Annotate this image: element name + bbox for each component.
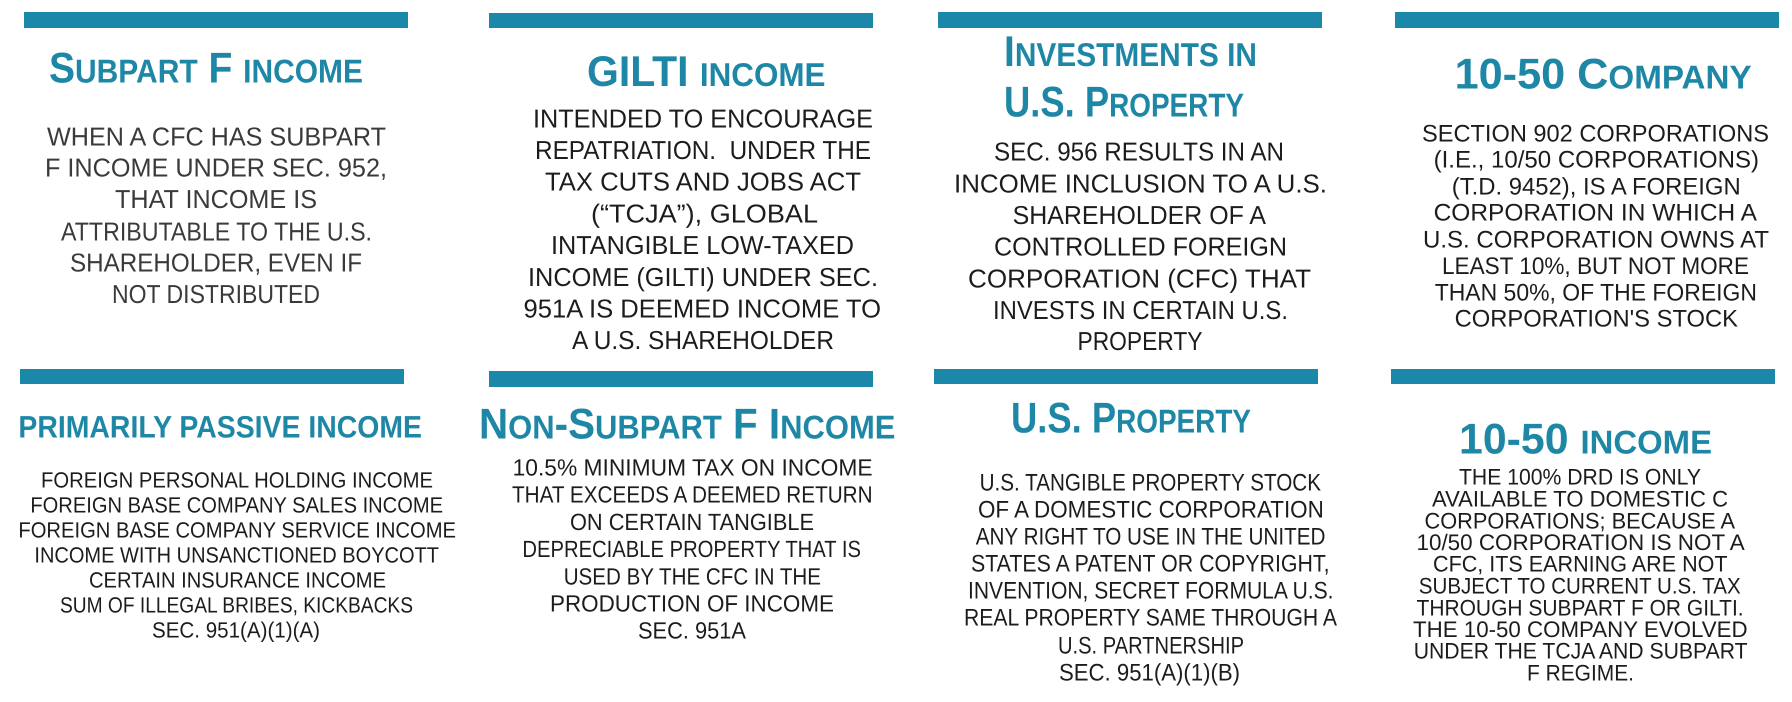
text: 10-50 company description: SECTION 902 CORPORATIONS [1422, 121, 1769, 148]
text: Subpart F description [45, 122, 387, 309]
text: U.S. property description: ANY RIGHT TO USE IN THE UNITED [976, 524, 1326, 551]
heading: GILTI income: GILTI INCOME [587, 48, 826, 96]
text: Investments description: SHAREHOLDER OF A [1013, 200, 1267, 230]
panel: U.S. property [934, 369, 1337, 687]
text: Non-Subpart F description: 10.5% MINIMUM TAX ON INCOME [513, 455, 873, 481]
text: 10-50 income description: SUBJECT TO CURRENT U.S. TAX [1419, 573, 1741, 598]
text: Subpart F description: THAT INCOME IS [115, 184, 317, 214]
heading: Subpart F income: SUBPART F INCOME [49, 45, 363, 93]
text: U.S. property description: U.S. PARTNERSHIP [1058, 632, 1244, 659]
text: Non-Subpart F description: DEPRECIABLE PROPERTY THAT IS [522, 536, 861, 562]
text: GILTI description: A U.S. SHAREHOLDER [572, 325, 834, 355]
panel: Primarily passive income [18, 369, 456, 643]
text: GILTI description: REPATRIATION. UNDER THE [535, 135, 871, 165]
text: GILTI description: TAX CUTS AND JOBS ACT [545, 167, 861, 197]
heading: 10-50 company: 10-50 COMPANY [1455, 50, 1752, 98]
text: GILTI description [524, 104, 881, 355]
text: GILTI description: 951A IS DEEMED INCOME TO [524, 294, 881, 324]
panel: GILTI income [489, 13, 881, 355]
bar: GILTI income [489, 13, 873, 28]
text: 10-50 income description: CFC, ITS EARNING ARE NOT [1433, 552, 1728, 577]
bar: Primarily passive income [20, 369, 404, 384]
text: Investments description: INVESTS IN CERTAIN U.S. [993, 295, 1288, 325]
text: 10-50 income description: AVAILABLE TO DOMESTIC C [1432, 487, 1728, 512]
text: 10-50 income description [1413, 464, 1748, 686]
text: Subpart F description: NOT DISTRIBUTED [112, 279, 320, 309]
heading: Investments in U.S. property [1004, 28, 1257, 127]
panel: 10-50 income [1391, 369, 1775, 686]
text: 10-50 company description: LEAST 10%, BUT NOT MORE [1442, 253, 1749, 280]
text: U.S. property description: REAL PROPERTY SAME THROUGH A [964, 605, 1337, 632]
text: 10-50 company description: CORPORATION'S STOCK [1455, 306, 1738, 333]
text: Investments description: CORPORATION (CFC) THAT [968, 263, 1311, 293]
text: Subpart F description: F INCOME UNDER SEC. 952, [45, 153, 387, 183]
heading: Primarily passive income: PRIMARILY PASSIVE INCOME [18, 409, 422, 444]
text: Investments description [954, 137, 1327, 356]
text: 10-50 income description: F REGIME. [1527, 661, 1634, 686]
heading: Investments in U.S. property: INVESTMENTS IN [1004, 28, 1257, 76]
text: Primarily passive income list: INCOME WITH UNSANCTIONED BOYCOTT [34, 543, 439, 568]
text: 10-50 company description: U.S. CORPORATION OWNS AT [1423, 226, 1769, 253]
text: Investments description: INCOME INCLUSION TO A U.S. [954, 169, 1327, 199]
text: GILTI description: INTENDED TO ENCOURAGE [533, 104, 873, 134]
text: 10-50 income description: UNDER THE TCJA AND SUBPART [1414, 639, 1748, 664]
text: Investments description: PROPERTY [1078, 326, 1202, 356]
text: 10-50 income description: THE 10-50 COMPANY EVOLVED [1413, 617, 1748, 642]
heading: Investments in U.S. property: U.S. PROPERTY [1004, 79, 1244, 127]
text: Primarily passive income list: SEC. 951(A)(1)(A) [152, 618, 320, 643]
text: GILTI description: (“TCJA”), GLOBAL [591, 199, 818, 229]
text: 10-50 income description: CORPORATIONS; BECAUSE A [1424, 508, 1735, 533]
bar: 10-50 income [1391, 369, 1775, 384]
text: Non-Subpart F description [512, 455, 873, 644]
panel: Investments in U.S. property [938, 12, 1327, 356]
text: Non-Subpart F description: THAT EXCEEDS A DEEMED RETURN [512, 482, 873, 508]
text: U.S. property description: U.S. TANGIBLE PROPERTY STOCK [980, 470, 1321, 497]
text: Primarily passive income list: FOREIGN BASE COMPANY SERVICE INCOME [18, 518, 456, 543]
text: 10-50 company description [1422, 121, 1769, 333]
text: Non-Subpart F description: PRODUCTION OF INCOME [550, 591, 834, 617]
text: U.S. property description: OF A DOMESTIC CORPORATION [978, 497, 1324, 524]
text: Non-Subpart F description: USED BY THE CFC IN THE [564, 563, 821, 589]
text: GILTI description: INCOME (GILTI) UNDER SEC. [528, 262, 878, 292]
panel: Non-Subpart F income [479, 371, 896, 644]
text: 10-50 income description: THE 100% DRD IS ONLY [1459, 464, 1701, 489]
text: Primarily passive income list: FOREIGN PERSONAL HOLDING INCOME [41, 468, 433, 493]
text: Primarily passive income list: FOREIGN BASE COMPANY SALES INCOME [30, 493, 443, 518]
bar: Investments in U.S. property [938, 12, 1322, 28]
heading: 10-50 income: 10-50 INCOME [1459, 415, 1712, 463]
text: 10-50 income description: 10/50 CORPORATION IS NOT A [1416, 530, 1745, 555]
text: 10-50 company description: (I.E., 10/50 CORPORATIONS) [1434, 147, 1759, 174]
text: U.S. property description: SEC. 951(A)(1)(B) [1059, 660, 1240, 687]
bar: U.S. property [934, 369, 1318, 384]
text: Non-Subpart F description: SEC. 951A [638, 618, 746, 644]
text: Non-Subpart F description: ON CERTAIN TANGIBLE [570, 509, 814, 535]
text: Primarily passive income list: SUM OF ILLEGAL BRIBES, KICKBACKS [60, 593, 413, 618]
text: 10-50 company description: CORPORATION IN WHICH A [1434, 200, 1757, 227]
bar: Subpart F income [24, 12, 408, 28]
text: GILTI description: INTANGIBLE LOW-TAXED [551, 230, 854, 260]
text: Primarily passive income list [18, 468, 456, 643]
text: 10-50 income description: THROUGH SUBPART F OR GILTI. [1416, 595, 1744, 620]
panel: Subpart F income [24, 12, 408, 309]
text: U.S. property description: INVENTION, SECRET FORMULA U.S. [968, 578, 1334, 605]
text: U.S. property description: STATES A PATENT OR COPYRIGHT, [971, 551, 1330, 578]
text: Investments description: SEC. 956 RESULTS IN AN [994, 137, 1284, 167]
text: Primarily passive income list: CERTAIN INSURANCE INCOME [89, 568, 386, 593]
bar: Non-Subpart F income [489, 371, 873, 387]
heading: Non-Subpart F income: NON-SUBPART F INCOME [479, 400, 896, 448]
text: 10-50 company description: THAN 50%, OF THE FOREIGN [1435, 280, 1757, 307]
text: Investments description: CONTROLLED FOREIGN [994, 232, 1287, 262]
text: Subpart F description: SHAREHOLDER, EVEN IF [70, 248, 362, 278]
heading: U.S. property: U.S. PROPERTY [1011, 394, 1251, 442]
text: Subpart F description: ATTRIBUTABLE TO THE U.S. [61, 217, 372, 247]
text: Subpart F description: WHEN A CFC HAS SUBPART [47, 122, 386, 152]
text: 10-50 company description: (T.D. 9452), IS A FOREIGN [1452, 173, 1741, 200]
bar: 10-50 company [1395, 12, 1779, 28]
panel: 10-50 company [1395, 12, 1779, 333]
text: U.S. property description [964, 470, 1337, 687]
